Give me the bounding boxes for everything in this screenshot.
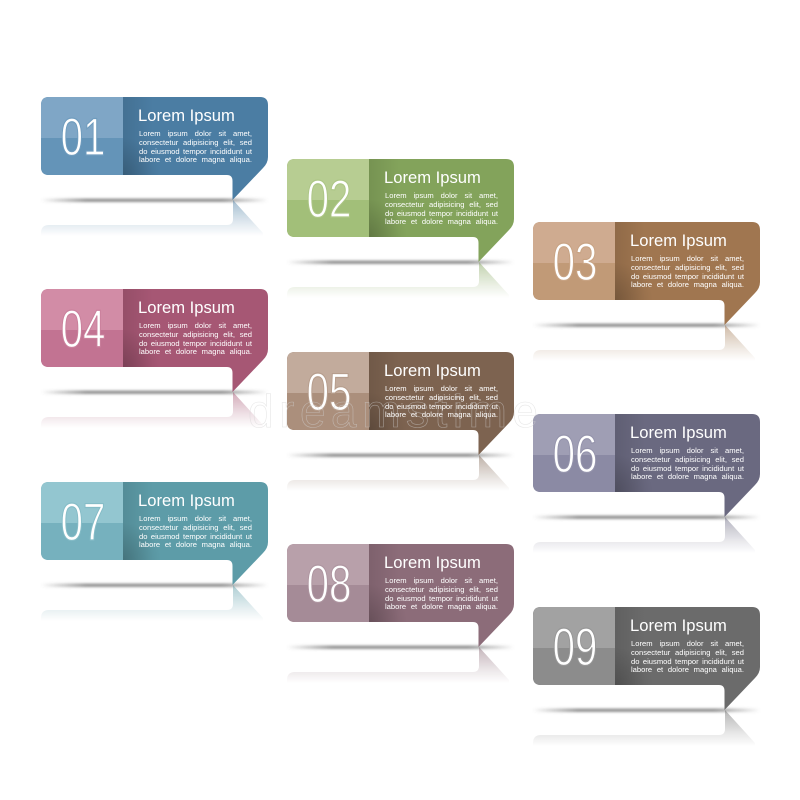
text block: card 04 xyxy=(139,321,252,356)
text block: card 07: labore et dolore magna aliqua. xyxy=(139,540,252,549)
text block: card 04: Lorem ipsum dolor sit amet, xyxy=(139,321,252,330)
panel: card 08: 08 xyxy=(307,554,351,613)
text block: card 05: labore et dolore magna aliqua. xyxy=(385,410,498,419)
heading: card 04: Lorem Ipsum xyxy=(138,298,235,316)
text block: card 02 xyxy=(385,191,498,226)
panel: card 09: 09 xyxy=(553,617,597,676)
heading: card 01: Lorem Ipsum xyxy=(138,106,235,124)
text block: card 08 xyxy=(385,576,498,611)
text block: card 09: labore et dolore magna aliqua. xyxy=(631,665,744,674)
text block: card 03: do eiusmod tempor incididunt ut xyxy=(631,272,744,281)
text block: card 02: consectetur adipisicing elit, sed xyxy=(385,200,498,209)
text block: card 07: Lorem ipsum dolor sit amet, xyxy=(139,514,252,523)
panel: card 04: 04 xyxy=(61,299,105,358)
text block: card 03: consectetur adipisicing elit, sed xyxy=(631,263,744,272)
text block: card 06: consectetur adipisicing elit, sed xyxy=(631,455,744,464)
text block: card 01: do eiusmod tempor incididunt ut xyxy=(139,147,252,156)
text block: card 07: consectetur adipisicing elit, sed xyxy=(139,523,252,532)
text block: card 04: labore et dolore magna aliqua. xyxy=(139,347,252,356)
text block: card 04: do eiusmod tempor incididunt ut xyxy=(139,339,252,348)
text block: card 02: do eiusmod tempor incididunt ut xyxy=(385,209,498,218)
heading: card 07: Lorem Ipsum xyxy=(138,490,235,510)
text block: card 02: labore et dolore magna aliqua. xyxy=(385,217,498,226)
panel: card 02 xyxy=(287,159,514,294)
text block: card 09: Lorem ipsum dolor sit amet, xyxy=(631,639,744,648)
text block: card 08: labore et dolore magna aliqua. xyxy=(385,602,498,611)
panel: card 08 xyxy=(287,544,514,678)
panel: card 07: 07 xyxy=(61,492,105,551)
text block: card 01: labore et dolore magna aliqua. xyxy=(139,155,252,164)
panel: card 04 xyxy=(41,289,268,424)
text block: card 06: labore et dolore magna aliqua. xyxy=(631,472,744,481)
heading: card 03: Lorem Ipsum xyxy=(630,230,727,250)
panel: card 03 xyxy=(533,222,760,357)
text block: card 05 xyxy=(385,384,498,419)
text block: card 03: labore et dolore magna aliqua. xyxy=(631,280,744,289)
watermark: dreamstime xyxy=(248,385,538,437)
text block: card 03: Lorem ipsum dolor sit amet, xyxy=(631,254,744,263)
text block: card 03 xyxy=(631,254,744,289)
text block: card 07: do eiusmod tempor incididunt ut xyxy=(139,532,252,541)
text block: card 02: Lorem ipsum dolor sit amet, xyxy=(385,191,498,200)
text block: card 09 xyxy=(631,639,744,674)
heading: card 05: Lorem Ipsum xyxy=(384,360,481,380)
text block: card 07 xyxy=(139,514,252,549)
text block: card 01 xyxy=(139,129,252,164)
text block: card 06: Lorem ipsum dolor sit amet, xyxy=(631,446,744,455)
heading: card 09: Lorem Ipsum xyxy=(630,616,727,634)
panel: card 06: 06 xyxy=(553,424,597,483)
panel: card 02: 02 xyxy=(307,169,351,228)
text block: card 06 xyxy=(631,446,744,481)
heading: card 02: Lorem Ipsum xyxy=(384,168,481,186)
panel: card 01: 01 xyxy=(61,107,105,166)
heading: card 06: Lorem Ipsum xyxy=(630,422,727,442)
text block: card 08: consectetur adipisicing elit, sed xyxy=(385,585,498,594)
text block: card 08: do eiusmod tempor incididunt ut xyxy=(385,594,498,603)
text block: card 09: consectetur adipisicing elit, sed xyxy=(631,648,744,657)
panel: card 07 xyxy=(41,482,268,617)
text block: card 01: Lorem ipsum dolor sit amet, xyxy=(139,129,252,138)
panel: card 09 xyxy=(533,607,760,742)
text block: card 06: do eiusmod tempor incididunt ut xyxy=(631,464,744,473)
panel: card 06 xyxy=(533,414,760,548)
text block: card 05: Lorem ipsum dolor sit amet, xyxy=(385,384,498,393)
text block: card 05: consectetur adipisicing elit, sed xyxy=(385,393,498,402)
heading: card 08: Lorem Ipsum xyxy=(384,552,481,572)
panel: card 03: 03 xyxy=(553,232,597,291)
panel: card 05 xyxy=(287,352,514,487)
text block: card 09: do eiusmod tempor incididunt ut xyxy=(631,657,744,666)
text block: card 04: consectetur adipisicing elit, sed xyxy=(139,330,252,339)
text block: card 08: Lorem ipsum dolor sit amet, xyxy=(385,576,498,585)
text block: card 05: do eiusmod tempor incididunt ut xyxy=(385,402,498,411)
panel: card 05: 05 xyxy=(307,362,351,421)
panel: card 01 xyxy=(41,97,268,232)
text block: card 01: consectetur adipisicing elit, sed xyxy=(139,138,252,147)
